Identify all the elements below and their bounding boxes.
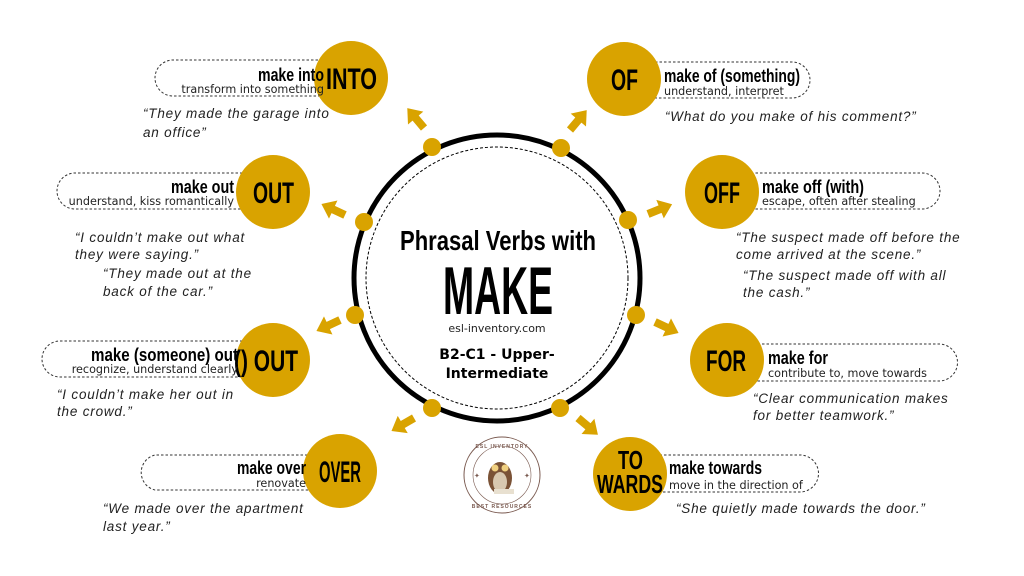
item: off: “The suspect made off before the <box>736 230 960 245</box>
item: towards: move in the direction of <box>669 479 804 492</box>
item: out: understand, kiss romantically <box>69 195 234 208</box>
item: over: last year.” <box>103 519 171 534</box>
item: off: “The suspect made off with all <box>743 268 947 283</box>
logo: owl badge: ESL INVENTORY <box>476 444 528 450</box>
item: over: renovate <box>256 477 306 490</box>
central circle <box>346 135 645 421</box>
item: for <box>690 323 958 423</box>
item: out: “They made out at the <box>103 266 252 281</box>
item: off <box>685 155 960 300</box>
item: for: FOR <box>706 345 746 378</box>
title: Intermediate <box>446 366 548 382</box>
item: someone out: recognize, understand clearly <box>72 363 238 376</box>
item: towards: make towards <box>669 458 762 478</box>
title: MAKE <box>443 253 553 329</box>
item: into <box>143 41 388 140</box>
item: out: OUT <box>253 177 294 210</box>
item: for: contribute to, move towards <box>768 367 927 380</box>
item: off: the cash.” <box>743 285 810 300</box>
logo: owl badge: ✦ <box>524 472 530 480</box>
item: someone out: make (someone) out <box>91 345 238 365</box>
title: Phrasal Verbs with <box>400 225 596 256</box>
item: into: make into <box>258 65 324 85</box>
item: someone out: “I couldn’t make her out in <box>57 387 234 402</box>
title: esl-inventory.com <box>448 322 546 335</box>
item: of: “What do you make of his comment?” <box>665 109 917 124</box>
title <box>400 225 596 382</box>
item: out: make out <box>171 177 234 197</box>
logo: owl badge: ✦ <box>474 472 480 480</box>
logo: owl badge: BEST RESOURCES <box>472 504 532 510</box>
item: someone out: the crowd.” <box>57 404 133 419</box>
item: off: OFF <box>704 177 740 210</box>
item: out: back of the car.” <box>103 284 213 299</box>
item: for: “Clear communication makes <box>753 391 949 406</box>
item: into: transform into something <box>181 83 324 96</box>
item: off: come arrived at the scene.” <box>736 247 921 262</box>
title: B2-C1 - Upper- <box>439 347 555 363</box>
item: for: make for <box>768 348 828 368</box>
item: out: “I couldn’t make out what <box>75 230 246 245</box>
item: into: “They made the garage into <box>143 106 330 121</box>
item: of: understand, interpret <box>664 85 785 98</box>
item: over: OVER <box>319 456 361 489</box>
item: towards: WARDS <box>597 469 663 499</box>
item: out: they were saying.” <box>75 247 199 262</box>
item: out <box>57 155 310 299</box>
item: for: for better teamwork.” <box>753 408 894 423</box>
item: towards: TO <box>618 445 643 475</box>
logo: owl badge <box>464 437 540 513</box>
item: off: make off (with) <box>762 177 864 197</box>
item: of: make of (something) <box>664 66 800 86</box>
item: towards <box>593 437 926 516</box>
item: over: make over <box>237 458 306 478</box>
item: off: escape, often after stealing <box>762 195 916 208</box>
arrows <box>312 102 683 442</box>
item: of: OF <box>611 64 638 97</box>
item: someone out <box>42 323 310 419</box>
item: into: INTO <box>326 63 377 96</box>
item: over: “We made over the apartment <box>103 501 304 516</box>
item: someone out: () OUT <box>234 345 298 378</box>
item: into: an office” <box>143 125 207 140</box>
item: towards: “She quietly made towards the door.” <box>676 501 926 516</box>
item: of <box>587 42 917 124</box>
item: over <box>103 434 377 534</box>
